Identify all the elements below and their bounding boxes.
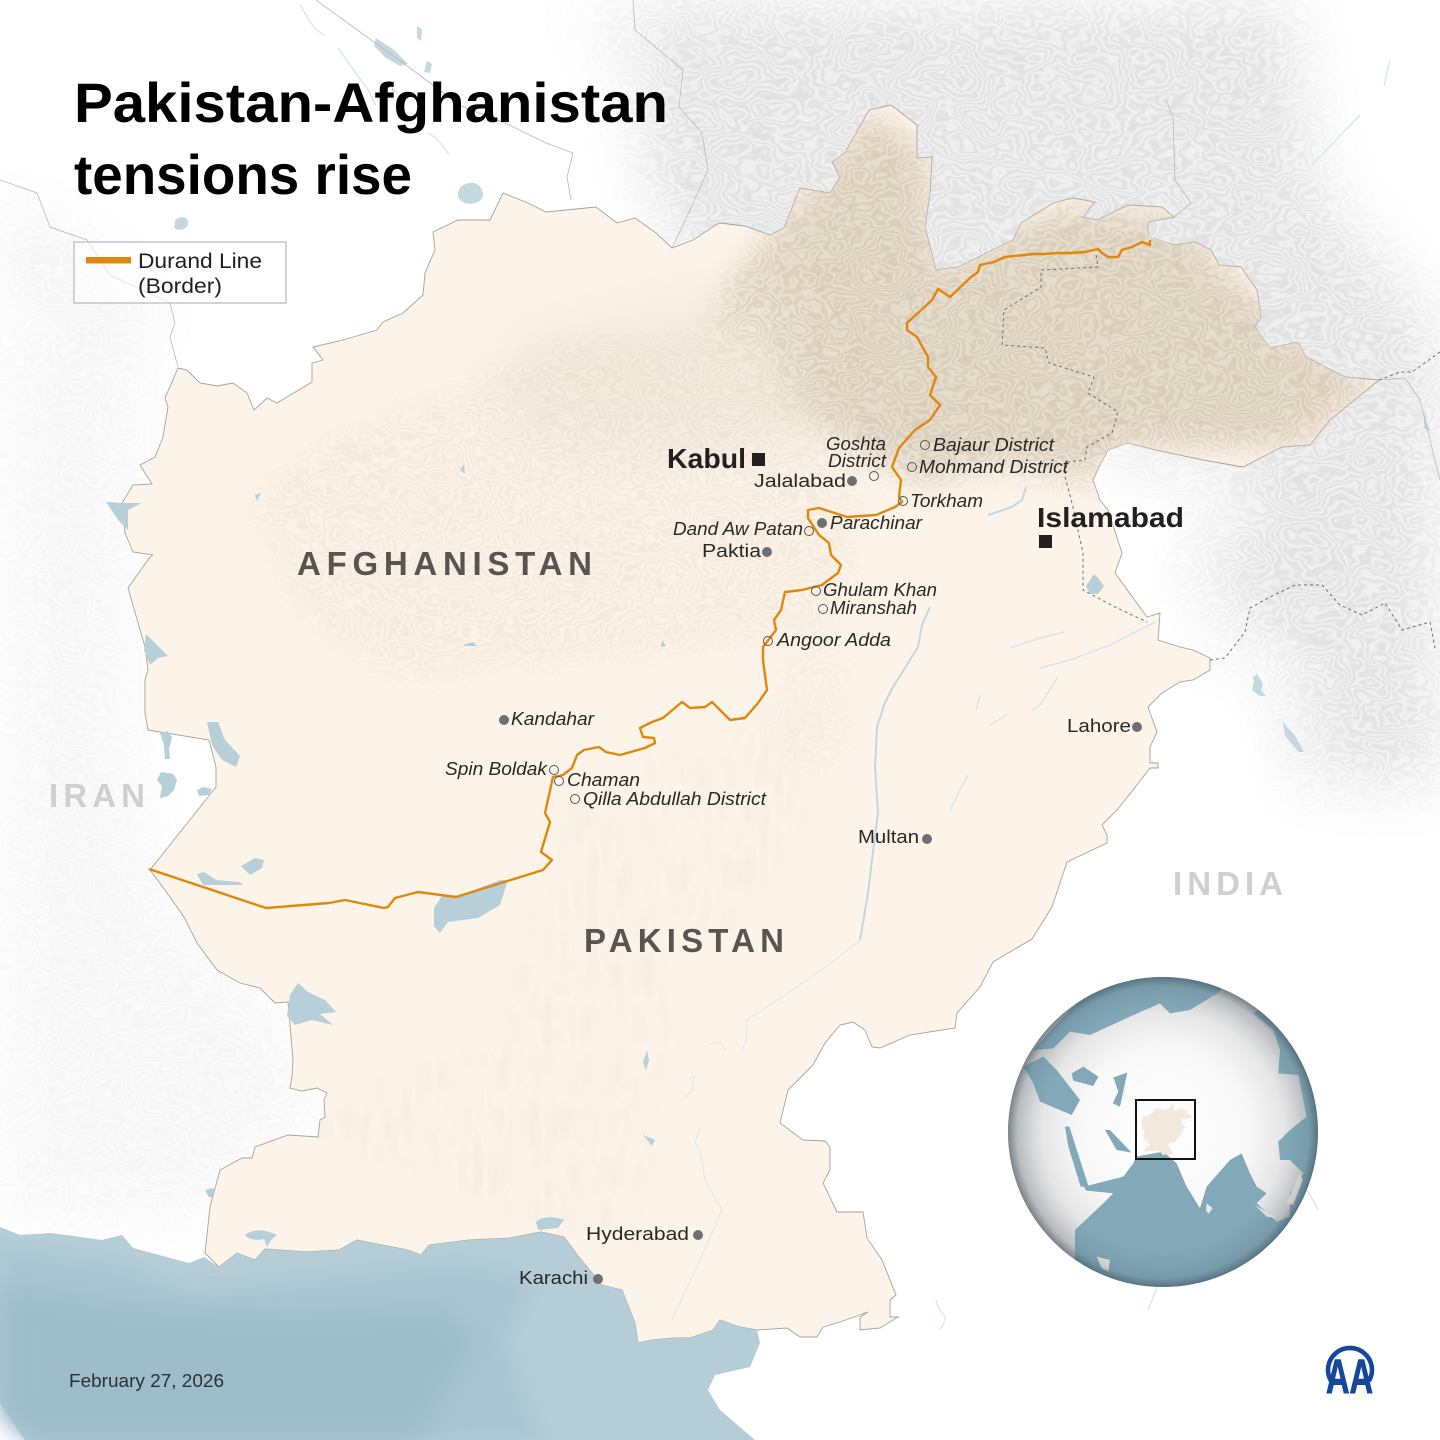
lakes and rivers on land: [106, 464, 1155, 1320]
city: Kandahar: Kandahar: [511, 709, 595, 729]
city: Lahore: Lahore: [1067, 716, 1131, 736]
globe inset land: [1141, 1104, 1193, 1155]
city: Paktia: Paktia: [702, 541, 762, 561]
place: Qilla Abdullah District: Qilla Abdullah District: [583, 789, 767, 809]
title: tensions rise: [74, 143, 412, 206]
small lakes: [205, 464, 1104, 1247]
title: Pakistan-Afghanistan: [74, 71, 668, 134]
lake: Hamun-i-Helmand: [157, 722, 240, 798]
date: February 27, 2026: [69, 1371, 224, 1391]
place: Goshta District: District: [828, 451, 887, 471]
locator globe: [1008, 973, 1323, 1293]
country label: Iran: IRAN: [49, 777, 145, 814]
globe locator box: [1136, 1100, 1195, 1159]
place: Dand Aw Patan: Dand Aw Patan: [673, 519, 803, 539]
land: Afghanistan and Pakistan: [122, 105, 1379, 1343]
city: Jalalabad: Jalalabad: [754, 471, 846, 491]
international borders outside main land: [0, 0, 1440, 480]
legend text: (Border): [138, 275, 222, 298]
capital: Islamabad: [1037, 502, 1184, 548]
legend: [74, 242, 286, 303]
legend swatch: Durand Line: [86, 257, 131, 264]
rivers: Punjab: [950, 622, 1155, 810]
place: Mohmand District: Mohmand District: [919, 457, 1069, 477]
country label: Pakistan: PAKISTAN: [584, 922, 784, 959]
legend text: [138, 250, 262, 298]
logo: Anadolu Agency: [1326, 1348, 1373, 1404]
river: Indus: [860, 607, 930, 940]
place: Bajaur District: Bajaur District: [933, 435, 1055, 455]
Arabian Sea: [0, 1227, 760, 1440]
place: Spin Boldak: Spin Boldak: [445, 759, 548, 779]
capital: Kabul: Kabul: [667, 443, 746, 474]
place: Miranshah: Miranshah: [830, 598, 917, 618]
land terrain shading: [264, 108, 1376, 758]
capital: Islamabad: Islamabad: [1037, 502, 1184, 533]
lake: Hamun-i-Mashkel: [434, 880, 508, 933]
place: Chaman: Chaman: [567, 770, 640, 790]
disputed Kashmir line of control: [1002, 255, 1440, 660]
lake: Hamoun west: [144, 634, 168, 665]
logo: Anadolu Agency: AA: [1326, 1351, 1373, 1404]
country label: Afghanistan: AFGHANISTAN: [297, 545, 592, 582]
Durand Line border: [149, 240, 1150, 908]
place: Goshta District: Goshta: [826, 434, 886, 454]
city: Parachinar: Parachinar: [830, 513, 923, 533]
city: Hyderabad: Hyderabad: [586, 1224, 689, 1244]
globe shading: [1008, 977, 1318, 1287]
city: Karachi: Karachi: [519, 1268, 588, 1288]
lake: Jazmurian: [287, 983, 336, 1025]
place: Torkham: Torkham: [910, 491, 983, 511]
river: Kabul: [988, 487, 1026, 515]
country label: India: INDIA: [1173, 865, 1283, 902]
title: [74, 71, 668, 206]
lake: Hamun-i-Lora: [197, 858, 264, 885]
legend text: Durand Line: [138, 250, 262, 273]
lake: Namak: [106, 502, 142, 530]
place: Angoor Adda: Angoor Adda: [776, 630, 891, 650]
city: Multan: Multan: [858, 827, 919, 847]
place: Goshta District: [826, 434, 887, 480]
globe oceans: [1023, 973, 1323, 1293]
place: Ghulam Khan: Ghulam Khan: [823, 580, 937, 600]
